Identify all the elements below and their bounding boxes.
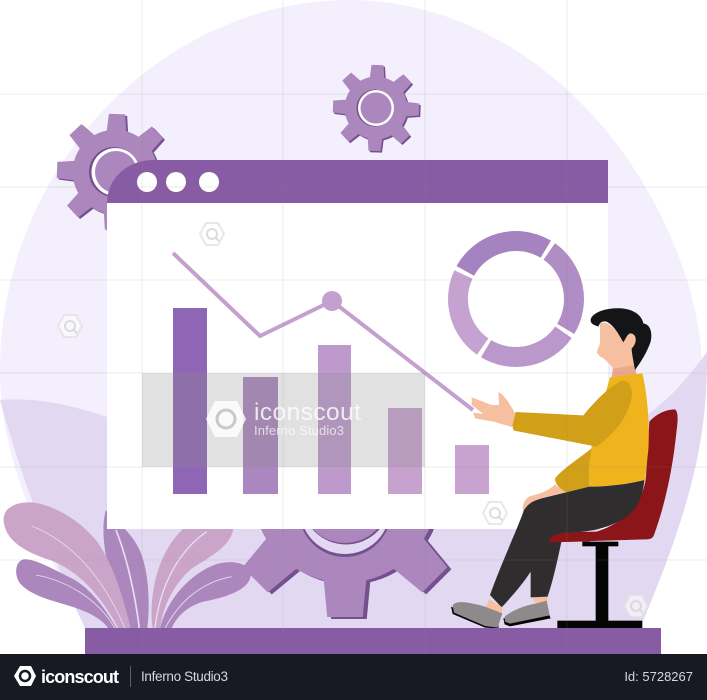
leaf: pink left [4, 502, 131, 628]
bar chart [173, 308, 489, 494]
pointing hand [472, 392, 515, 427]
trousers [490, 480, 644, 607]
leaf: purple left [16, 559, 117, 628]
leaf: centre [103, 510, 149, 628]
near sleeve [512, 381, 632, 447]
leaf: pink right [152, 517, 233, 628]
footer bar [0, 654, 707, 700]
chair seat and back [548, 409, 678, 542]
shoe soles [451, 607, 551, 628]
torso [589, 373, 649, 487]
ankles [486, 597, 547, 614]
face [597, 322, 636, 369]
centre watermark: Inferno Studio3 [254, 423, 344, 438]
footer logo [14, 666, 36, 686]
leaf: purple right [160, 562, 251, 628]
leaf veins [32, 526, 232, 628]
base platform [85, 628, 661, 654]
window title bar [107, 160, 608, 203]
footer brand: iconscout [41, 667, 119, 687]
neck [612, 358, 637, 378]
plant [4, 502, 251, 628]
person on chair [451, 308, 678, 628]
line chart [173, 253, 473, 410]
centre watermark [142, 373, 425, 467]
hand on knee [523, 484, 565, 512]
hair [591, 308, 651, 370]
browser window [107, 160, 608, 529]
window body [107, 203, 608, 529]
donut chart [435, 218, 597, 380]
watermark hex marks [58, 223, 648, 617]
chair stand [557, 542, 642, 628]
far sleeve [555, 448, 592, 492]
gear: bottom large [218, 363, 476, 619]
footer id: Id: 5728267 [624, 669, 693, 684]
window dots [137, 172, 219, 192]
background mound [0, 352, 707, 628]
gear: top left [55, 112, 177, 233]
shoes [453, 602, 502, 628]
centre watermark: iconscout [254, 399, 361, 426]
footer author: Inferno Studio3 [141, 669, 228, 684]
chair seat front edge [548, 532, 590, 542]
gear: top centre [332, 64, 422, 154]
